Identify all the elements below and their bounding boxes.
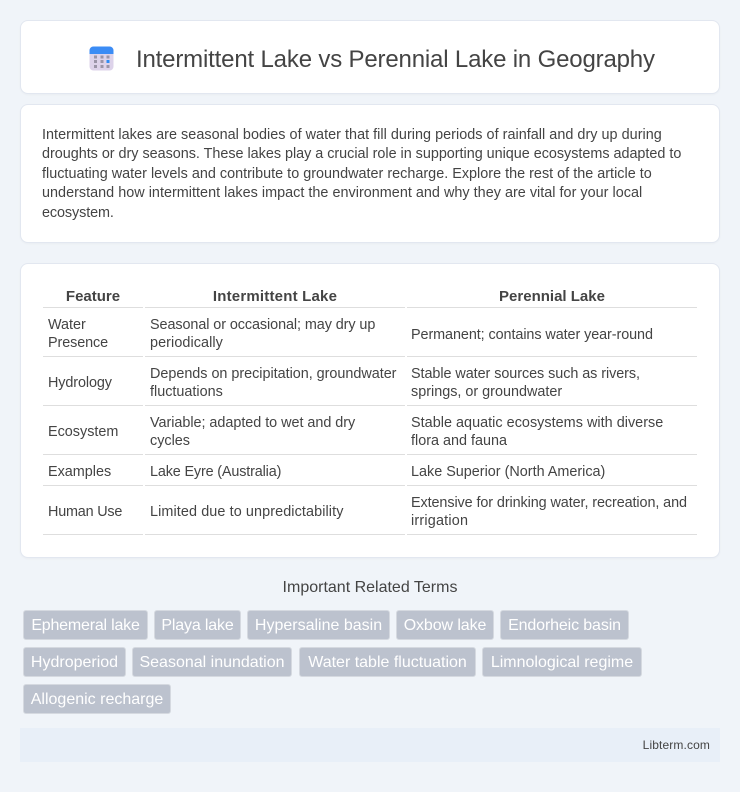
row: water presence: periodically: [150, 335, 223, 351]
related term tags: Hypersaline basin: [255, 617, 382, 634]
related term tags: Oxbow lake: [404, 617, 486, 634]
title: Intermittent Lake vs Perennial Lake in Geography: [136, 46, 655, 73]
panel: title header: [20, 20, 720, 94]
row: ecosystem: cycles: [150, 433, 190, 449]
row: water presence: Presence: [48, 335, 108, 351]
row: hydrology: springs, or groundwater: [411, 384, 562, 400]
row: hydrology: fluctuations: [150, 384, 223, 400]
row: human use: Limited due to unpredictability: [150, 504, 344, 520]
intro paragraph: understand how intermittent lakes impact the environment and why they are vital for your local: [42, 185, 642, 201]
row: ecosystem: Stable aquatic ecosystems with diverse: [411, 415, 663, 431]
related term tags: Playa lake: [161, 617, 234, 634]
intro paragraph: ecosystem.: [42, 205, 114, 221]
footer: [20, 728, 720, 762]
row: human use: Human Use: [48, 504, 122, 520]
row: hydrology: Stable water sources such as rivers,: [411, 366, 640, 382]
table header: Intermittent Lake: [213, 288, 337, 305]
row: water presence: Permanent; contains water year-round: [411, 327, 653, 343]
row: ecosystem: Ecosystem: [48, 424, 118, 440]
row: human use: [48, 495, 687, 529]
related term tags: Limnological regime: [491, 654, 633, 671]
intro paragraph: droughts or dry seasons. These lakes play a crucial role in supporting unique ecosystems adapted to: [42, 146, 681, 162]
intro paragraph: [42, 127, 681, 221]
table header: [66, 288, 605, 305]
row: water presence: Water: [48, 317, 86, 333]
heading: related terms: Important Related Terms: [283, 579, 457, 596]
related term tags: Water table fluctuation: [308, 654, 467, 671]
row: examples: Lake Eyre (Australia): [150, 464, 281, 480]
panel: comparison table: [20, 263, 720, 558]
related term tags: Hydroperiod: [31, 654, 118, 671]
footer credit: Libterm.com: [643, 738, 710, 752]
icon: calendar grid: [90, 46, 114, 70]
intro paragraph: fluctuating water levels and contribute to groundwater recharge. Explore the rest of the article to: [42, 166, 652, 182]
row: hydrology: Depends on precipitation, groundwater: [150, 366, 396, 382]
row: human use: Extensive for drinking water, recreation, and: [411, 495, 687, 511]
row: water presence: Seasonal or occasional; may dry up: [150, 317, 375, 333]
row: ecosystem: Variable; adapted to wet and dry: [150, 415, 355, 431]
table header: Perennial Lake: [499, 288, 605, 305]
panel: intro text: [20, 104, 720, 243]
related term tags: [23, 610, 642, 714]
row: human use: irrigation: [411, 513, 468, 529]
related term tags: Endorheic basin: [508, 617, 621, 634]
row: ecosystem: [48, 415, 663, 449]
row: examples: Examples: [48, 464, 111, 480]
row: hydrology: Hydrology: [48, 375, 112, 391]
row: examples: [48, 464, 605, 480]
related term tags: Ephemeral lake: [31, 617, 140, 634]
intro paragraph: Intermittent lakes are seasonal bodies of water that fill during periods of rainfall and dry up during: [42, 127, 662, 143]
row: water presence: [48, 317, 653, 351]
related term tags: Seasonal inundation: [139, 654, 284, 671]
row: ecosystem: flora and fauna: [411, 433, 507, 449]
row: hydrology: [48, 366, 640, 400]
table header: Feature: [66, 288, 120, 305]
row: examples: Lake Superior (North America): [411, 464, 605, 480]
related term tags: Allogenic recharge: [31, 691, 163, 708]
